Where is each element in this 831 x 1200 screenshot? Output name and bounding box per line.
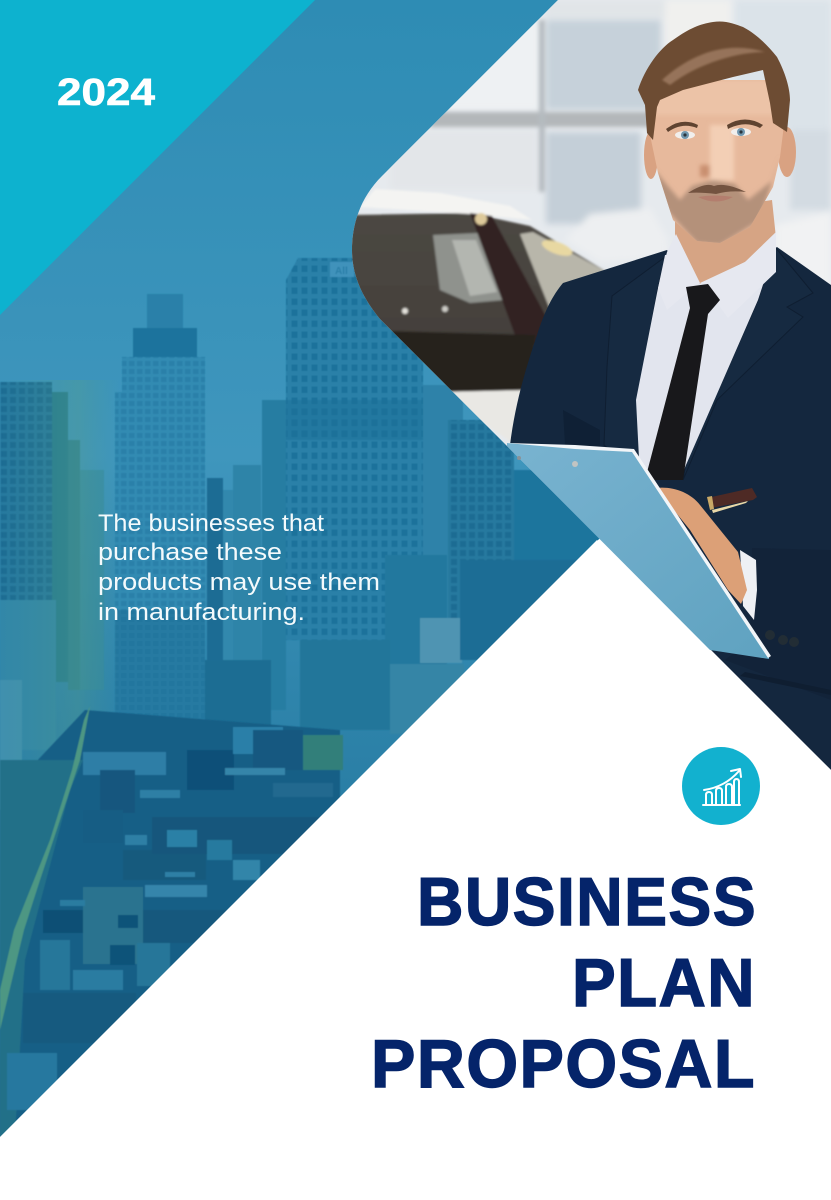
low-rise city blocks	[0, 706, 343, 1137]
title: PLAN	[572, 945, 756, 1021]
description text	[98, 510, 380, 626]
jacket sleeve with buttons	[740, 630, 831, 695]
photo: man with clipboard in car showroom	[340, 0, 831, 790]
title: PROPOSAL	[371, 1026, 756, 1102]
man: ears	[644, 127, 796, 179]
title: BUSINESS	[417, 864, 757, 940]
man: tie	[645, 284, 720, 480]
shirt cuff	[740, 550, 757, 620]
man: neck	[675, 200, 776, 284]
man: face	[650, 80, 783, 243]
description text: products may use them	[98, 569, 380, 596]
pen	[707, 488, 757, 513]
description text: purchase these	[98, 539, 282, 566]
icon: growth chart	[682, 747, 760, 825]
man: hair	[638, 21, 790, 140]
title	[371, 864, 757, 1102]
panel: white lower triangle	[0, 540, 831, 1200]
clipboard	[507, 443, 771, 659]
panel: city skyline	[0, 0, 620, 1140]
jacket pocket	[563, 410, 600, 446]
hair highlight	[662, 48, 765, 85]
description text: in manufacturing.	[98, 599, 305, 626]
panel: city skyline: All	[335, 266, 348, 277]
year label: 2024	[57, 72, 155, 114]
man: shirt	[636, 254, 764, 470]
hand	[656, 488, 747, 604]
man: lapels	[604, 247, 813, 480]
man: jacket	[510, 247, 831, 790]
man: collar	[658, 232, 776, 288]
panel: cyan corner triangle	[0, 0, 315, 315]
description text: The businesses that	[98, 510, 324, 537]
